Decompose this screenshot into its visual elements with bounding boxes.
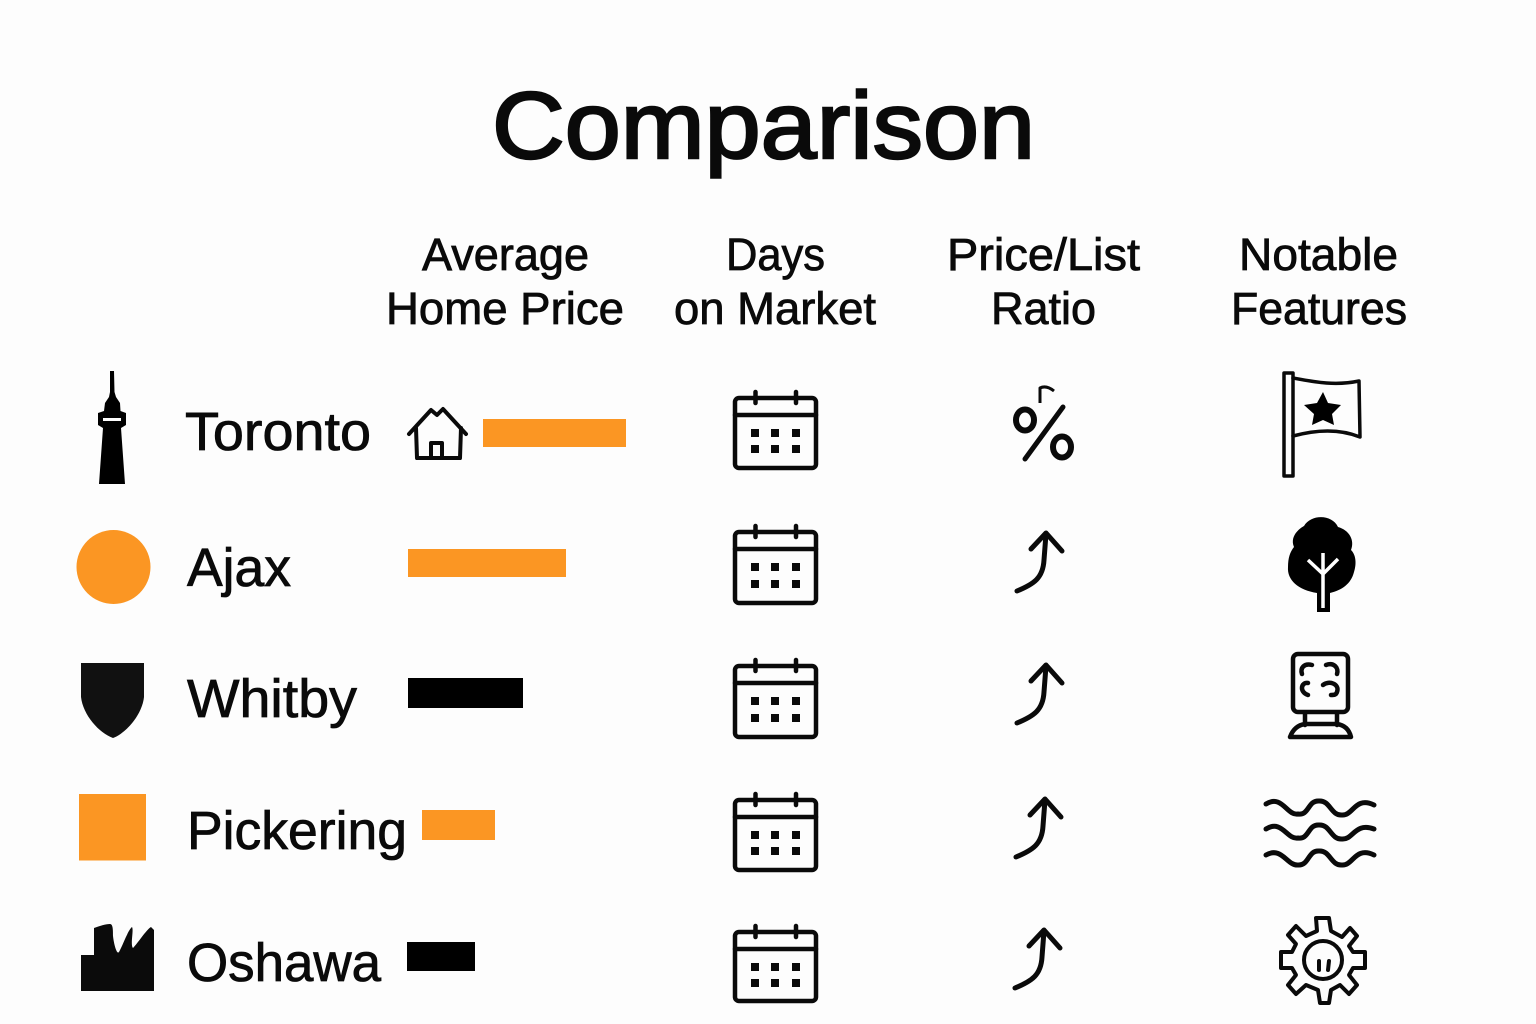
column heading: average home price: Home Price	[386, 283, 624, 334]
icon: rising arrow	[1017, 533, 1062, 591]
icon: orange square	[79, 794, 146, 860]
bar: Oshawa price	[407, 942, 475, 971]
icon: shield	[81, 663, 144, 738]
title: Comparison	[492, 73, 1035, 179]
bar: Whitby price	[408, 678, 523, 708]
icon: percent	[1016, 387, 1071, 459]
row: Whitby	[81, 654, 1351, 738]
icon: rising arrow	[1015, 930, 1060, 988]
bar: Toronto price	[483, 419, 626, 447]
column heading: days on market: on Market	[674, 283, 876, 334]
icon: waves	[1266, 801, 1374, 865]
icon: calendar	[735, 392, 816, 468]
icon: tree	[1288, 517, 1356, 612]
icon: flag with star	[1284, 373, 1360, 476]
icon: rising arrow	[1016, 799, 1061, 857]
row: Ajax	[76, 517, 1356, 612]
row: Toronto	[98, 371, 1360, 484]
column heading: notable features: Notable	[1239, 229, 1398, 280]
label: Ajax: Ajax	[187, 538, 291, 598]
icon: CN Tower	[98, 371, 126, 484]
row: Pickering	[79, 794, 1374, 870]
label: Pickering: Pickering	[187, 801, 407, 861]
column heading: days on market: Days	[726, 229, 825, 280]
label: Whitby: Whitby	[187, 669, 357, 729]
column heading: notable features: Features	[1231, 283, 1407, 334]
icon: calendar	[735, 526, 816, 603]
icon: calendar	[735, 794, 816, 870]
column heading: average home price	[386, 229, 624, 334]
column heading: price/list ratio: Price/List	[947, 229, 1141, 280]
bar: Ajax price	[408, 549, 566, 577]
icon: monitor landmark	[1290, 654, 1351, 737]
column heading: notable features	[1231, 229, 1407, 334]
icon: house	[409, 409, 466, 458]
column heading: price/list ratio: Ratio	[991, 283, 1096, 334]
icon: orange circle	[76, 530, 150, 604]
row: Oshawa	[81, 918, 1365, 1003]
column heading: days on market	[674, 229, 876, 334]
icon: calendar	[735, 926, 816, 1001]
icon: rising arrow	[1017, 665, 1062, 723]
label: Oshawa: Oshawa	[187, 933, 382, 993]
column heading: average home price: Average	[422, 229, 589, 280]
icon: gear	[1281, 918, 1365, 1003]
icon: factory	[81, 924, 154, 991]
column heading: price/list ratio	[947, 229, 1141, 334]
label: Toronto: Toronto	[185, 402, 371, 462]
icon: calendar	[735, 660, 816, 737]
bar: Pickering price	[422, 810, 495, 840]
